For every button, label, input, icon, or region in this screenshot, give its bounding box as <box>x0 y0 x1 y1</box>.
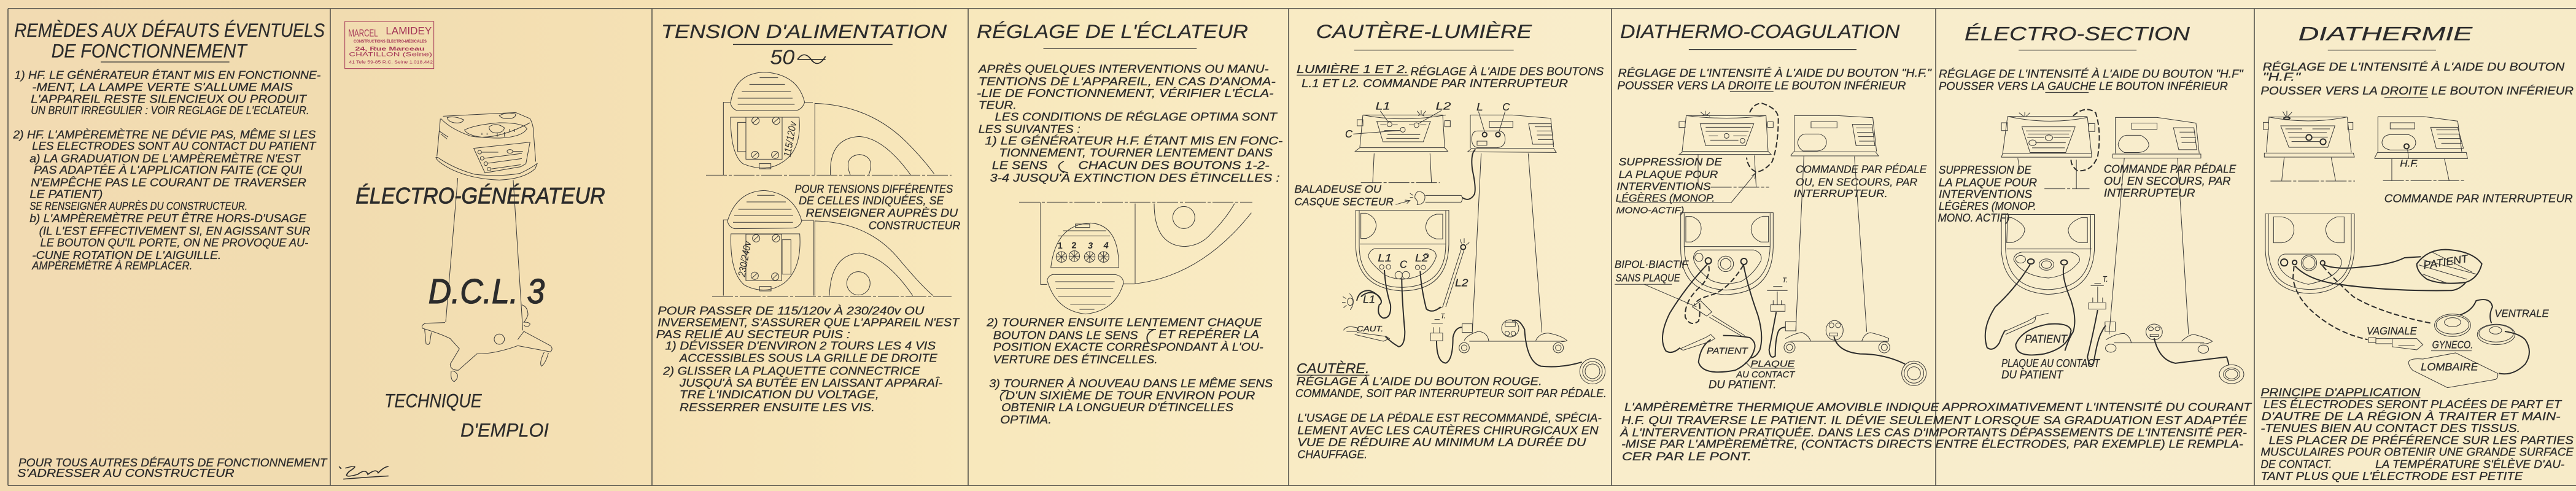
text block: changement de tension: 1) DÉVISSER D'ENVIRON 2 TOURS LES 4 VIS <box>665 339 936 352</box>
diagram: branchement diathermo-coagulation: T. <box>1782 277 1788 284</box>
heading: électro-section: ÉLECTRO-SECTION <box>1965 23 2190 44</box>
text block: conditions de réglage: 3) TOURNER À NOUVEAU DANS LE MÊME SENS <box>989 377 1273 390</box>
diagram: branchement diathermo-coagulation <box>1615 103 1927 385</box>
text block: liste des défauts <box>13 68 320 272</box>
panel: réglage de l'éclateur <box>977 21 1282 426</box>
heading: remèdes: DE FONCTIONNEMENT <box>52 40 248 61</box>
text block: cautère: LEMENT AVEC LES CAUTÈRES CHIRURGICAUX EN <box>1297 424 1599 437</box>
heading: diathermo-coagulation: DIATHERMO-COAGULATION <box>1620 21 1900 42</box>
diagram: branchement cautère-lumière: L1 <box>1378 252 1392 264</box>
text block: liste des défauts: LE BOUTON QU'IL PORTE, ON NE PROVOQUE AU- <box>41 236 308 249</box>
diagram: branchement diathermo-coagulation: LÉGÈRES (MONOP. <box>1616 191 1715 204</box>
diagram: branchement diathermo-coagulation: INTERVENTIONS <box>1616 180 1711 192</box>
callout: tensions différentes: CONSTRUCTEUR <box>869 219 960 232</box>
diagram: branchement électro-section: COMMANDE PAR PÉDALE <box>2104 162 2237 176</box>
text block: liste des défauts: SE RENSEIGNER AUPRÈS DU CONSTRUCTEUR. <box>29 199 247 212</box>
heading: réglage: RÉGLAGE DE L'ÉCLATEUR <box>977 21 1248 42</box>
diagram: boutons de l'éclateur: 2 <box>1071 241 1076 250</box>
text block: lumière: L.1 ET L2. COMMANDE PAR INTERRUPTEUR <box>1302 77 1568 90</box>
icon: stamp: CHATILLON (Seine) <box>349 52 432 58</box>
diagram: branchement diathermie: GYNECO. <box>2432 338 2473 350</box>
text block: liste des défauts: 1) HF. LE GÉNÉRATEUR ÉTANT MIS EN FONCTIONNE- <box>14 68 320 82</box>
text block: conditions de réglage: OPTIMA. <box>1000 414 1052 426</box>
icon: stamp: MARCEL <box>348 27 378 39</box>
panel: électro-section <box>1938 23 2244 384</box>
heading: technique d'emploi: TECHNIQUE <box>384 390 482 411</box>
text block: cautère <box>1295 360 1607 461</box>
callout: tensions différentes <box>794 182 960 232</box>
text block: conditions de réglage: VERTURE DES ÉTINCELLES. <box>993 353 1158 366</box>
text block: liste des défauts: LES ELECTRODES SONT AU CONTACT DU PATIENT <box>32 140 317 152</box>
heading: remèdes: REMÈDES AUX DÉFAUTS ÉVENTUELS <box>14 20 325 41</box>
heading: modèle D.C.L. 3: D.C.L. 3 <box>429 272 545 311</box>
text block: changement de tension: JUSQU'À SA BUTÉE EN LAISSANT APPARAÎ- <box>679 376 942 389</box>
diagram: branchement diathermo-coagulation: LA PLAQUE POUR <box>1619 168 1718 180</box>
diagram: branchement cautère-lumière: L2 <box>1436 99 1451 112</box>
diagram: branchement diathermo-coagulation: SUPPRESSION DE <box>1619 155 1722 168</box>
text block: conditions de réglage: LES SUIVANTES : <box>979 123 1080 136</box>
diagram: branchement diathermie: VAGINALE <box>2367 325 2417 337</box>
icon: stamp: 41 Tele 59-85 R.C. Seine 1.018.442 <box>349 59 433 64</box>
callout: tensions différentes: DE CELLES INDIQUÉES, SE <box>799 194 944 207</box>
text block: réglage électro-section: RÉGLAGE DE L'INTENSITÉ À L'AIDE DU BOUTON "H.F" <box>1939 67 2244 80</box>
diagram: branchement cautère-lumière: BALADEUSE OU <box>1294 183 1381 195</box>
diagram: branchement diathermo-coagulation: BIPOL·BIACTIF <box>1615 258 1689 271</box>
panel: diathermie <box>2260 23 2574 482</box>
diagram: branchement diathermo-coagulation: OU, EN SECOURS, PAR <box>1796 176 1917 188</box>
text block: principe d'application: DE CONTACT. <box>2260 458 2332 471</box>
diagram: branchement diathermie <box>2264 111 2549 388</box>
text block: changement de tension: RESSERRER ENSUITE LES VIS. <box>680 401 875 414</box>
diagram: branchement électro-section: SUPPRESSION DE <box>1939 164 2031 176</box>
text block: liste des défauts: -CUNE ROTATION DE L'AIGUILLE. <box>32 249 221 261</box>
diagram: boutons de l'éclateur: 4 <box>1103 241 1109 250</box>
frequency label 50 <box>770 46 826 69</box>
panel: cautère-lumière <box>1294 21 1607 461</box>
text block: cautère: L'USAGE DE LA PÉDALE EST RECOMMANDÉ, SPÉCIA- <box>1297 411 1602 425</box>
text block: changement de tension: PAS RELIÉ AU SECTEUR PUIS : <box>656 328 850 341</box>
frequency label 50: 50 <box>770 46 795 69</box>
diagram: boutons de l'éclateur: 1 <box>1058 241 1063 251</box>
text block: principe d'application: TANT PLUS QUE L'ÉLECTRODE EST PETITE <box>2260 470 2523 482</box>
footer note: S'ADRESSER AU CONSTRUCTEUR <box>17 467 235 479</box>
text block: conditions de réglage: D'UN SIXIÈME DE TOUR ENVIRON POUR <box>1006 389 1255 402</box>
text block: ampèremètre thermique: CER PAR LE PONT. <box>1622 450 1752 463</box>
diagram: branchement électro-section <box>1938 109 2244 384</box>
label: du patient: DU PATIENT. <box>1709 378 1776 391</box>
diagram: branchement diathermo-coagulation: INTERRUPTEUR. <box>1794 187 1888 199</box>
heading: remèdes <box>14 20 325 62</box>
diagram: boutons de l'éclateur: 3 <box>1088 241 1093 251</box>
text block: conditions de réglage: 1) LE GÉNÉRATEUR H.F. ÉTANT MIS EN FONC- <box>985 134 1282 147</box>
text block: conditions de réglage: TEUR. <box>979 99 1017 112</box>
diagram: branchement électro-section: DU PATIENT <box>2001 368 2064 381</box>
text block: réglage diathermie <box>2260 60 2574 205</box>
diagram: branchement cautère-lumière: L2 <box>1455 277 1468 289</box>
panel: couverture <box>339 21 605 479</box>
heading: technique d'emploi <box>384 390 549 441</box>
diagram: boutons de l'éclateur <box>1019 202 1252 314</box>
text block: conditions de réglage: -LIE DE FONCTIONNEMENT, VÉRIFIER L'ÉCLA- <box>977 87 1273 99</box>
text block: conditions de réglage: POSITION EXACTE CORRESPONDANT À L'OU- <box>993 340 1263 354</box>
text block: conditions de réglage: CHACUN DES BOUTONS 1-2- <box>1078 159 1270 172</box>
diagram: branchement diathermie: LOMBAIRE <box>2421 360 2478 373</box>
heading: tension: TENSION D'ALIMENTATION <box>661 21 947 42</box>
diagram: branchement diathermo-coagulation: MONO-ACTIF) <box>1616 206 1684 215</box>
diagram: branchement cautère-lumière: T. <box>1441 312 1446 320</box>
heading: diathermie: DIATHERMIE <box>2299 23 2473 44</box>
text block: conditions de réglage: TIONNEMENT, TOURNER LENTEMENT DANS <box>999 147 1273 159</box>
text block: lumière <box>1297 63 1604 90</box>
text block: changement de tension: INVERSEMENT, S'ASSURER QUE L'APPAREIL N'EST <box>658 316 960 329</box>
diagram: branchement cautère-lumière: CAUT. <box>1357 324 1383 333</box>
diagram: branchement électro-section: PLAQUE AU CONTACT <box>2001 357 2101 369</box>
text block: cautère: VUE DE RÉDUIRE AU MINIMUM LA DURÉE DU <box>1297 436 1586 449</box>
diagram: branchement cautère-lumière: C <box>1502 101 1510 113</box>
diagram: branchement cautère-lumière: L <box>1476 101 1483 113</box>
text block: lumière: RÉGLAGE À L'AIDE DES BOUTONS <box>1411 64 1604 78</box>
diagram: branchement diathermo-coagulation: AU CONTACT <box>1736 370 1795 380</box>
icon: stamp: LAMIDEY <box>386 25 432 37</box>
text block: changement de tension <box>656 304 960 414</box>
text block: liste des défauts: (IL L'EST EFFECTIVEMENT SI, EN AGISSANT SUR <box>39 225 311 238</box>
text block: lumière: LUMIÈRE 1 ET 2. <box>1297 63 1408 75</box>
diagram: branchement cautère-lumière: CASQUE SECTEUR <box>1294 195 1394 207</box>
text block: conditions de réglage: ET REPÉRER LA <box>1158 328 1259 341</box>
diagram: branchement électro-section: INTERRUPTEUR <box>2104 187 2195 199</box>
diagram: branchement diathermie: VENTRALE <box>2494 307 2549 320</box>
text block: réglage diathermo <box>1617 66 1932 92</box>
text block: liste des défauts: AMPÈREMÈTRE À REMPLACER. <box>31 259 192 272</box>
text block: conditions de réglage: BOUTON DANS LE SENS <box>993 329 1138 342</box>
text block: liste des défauts: -MENT, LA LAMPE VERTE S'ALLUME MAIS <box>32 81 293 93</box>
diagram: branchement électro-section: LA PLAQUE POUR <box>1939 176 2037 189</box>
diagram: connecteur tension <box>706 72 952 296</box>
text block: réglage diathermie: "H.F." <box>2263 71 2302 83</box>
heading: cautère-lumière: CAUTÈRE-LUMIÈRE <box>1316 21 1532 42</box>
text block: changement de tension: 2) GLISSER LA PLAQUETTE CONNECTRICE <box>662 365 920 377</box>
text block: conditions de réglage: 2) TOURNER ENSUITE LENTEMENT CHAQUE <box>986 316 1262 329</box>
text block: cautère: RÉGLAGE À L'AIDE DU BOUTON ROUGE. <box>1297 374 1542 388</box>
diagram: connecteur tension: 115/120v <box>782 120 799 158</box>
diagram: branchement cautère-lumière <box>1294 99 1605 384</box>
diagram: branchement électro-section: PATIENT <box>2025 333 2068 346</box>
icon: stamp: 24, Rue Marceau <box>355 46 425 52</box>
panel: remèdes aux défauts <box>13 20 328 479</box>
diagram: branchement diathermie: PATIENT <box>2423 252 2470 271</box>
text block: conditions de réglage: TENTIONS DE L'APPAREIL, EN CAS D'ANOMA- <box>979 75 1276 88</box>
icon: generator on stand <box>422 112 552 382</box>
text block: réglage électro-section <box>1939 67 2244 93</box>
diagram: branchement diathermie: H.F. <box>2400 159 2418 169</box>
text block: conditions de réglage <box>977 62 1282 426</box>
footer note <box>17 456 328 479</box>
text block: réglage diathermo: RÉGLAGE DE L'INTENSITÉ À L'AIDE DU BOUTON "H.F." <box>1618 66 1932 79</box>
text block: liste des défauts: N'EMPÊCHE PAS LE COURANT DE TRAVERSER <box>31 176 306 189</box>
heading: technique d'emploi: D'EMPLOI <box>460 419 549 441</box>
panel: tension d'alimentation <box>656 21 960 414</box>
text block: principe d'application <box>2260 386 2574 482</box>
diagram: branchement électro-section: T. <box>2103 275 2108 284</box>
text block: changement de tension: ACCESSIBLES SOUS LA GRILLE DE DROITE <box>678 352 937 365</box>
text block: liste des défauts: L'APPAREIL RESTE SILENCIEUX OU PRODUIT <box>31 93 308 106</box>
diagram: branchement électro-section: OU, EN SECOURS, PAR <box>2104 175 2231 187</box>
text block: réglage électro-section: POUSSER VERS LA GAUCHE LE BOUTON INFÉRIEUR <box>1939 79 2228 93</box>
text block: principe d'application: -TENUES BIEN AU CONTACT DES TISSUS. <box>2260 422 2520 435</box>
text block: changement de tension: TRE L'INDICATION DU VOLTAGE, <box>680 389 879 401</box>
text block: liste des défauts: 2) HF. L'AMPÈREMÈTRE NE DÉVIE PAS, MÊME SI LES <box>13 128 316 141</box>
icon: stamp <box>345 21 434 69</box>
text block: réglage diathermo: POUSSER VERS LA DROITE LE BOUTON INFÉRIEUR <box>1617 79 1906 92</box>
diagram: branchement cautère-lumière: C <box>1345 128 1352 140</box>
text block: liste des défauts: a) LA GRADUATION DE L'AMPÈREMÈTRE N'EST <box>29 152 301 165</box>
text block: conditions de réglage: OBTENIR LA LONGUEUR D'ÉTINCELLES <box>1001 401 1234 414</box>
icon: signature <box>339 466 389 479</box>
diagram: connecteur tension: 230/240v <box>735 239 754 278</box>
text block: principe d'application: PRINCIPE D'APPLICATION <box>2260 386 2421 399</box>
diagram: branchement diathermo-coagulation: SANS PLAQUE <box>1616 271 1680 284</box>
text block: liste des défauts: b) L'AMPÈREMÈTRE PEUT ÊTRE HORS-D'USAGE <box>29 212 306 225</box>
text block: conditions de réglage: LE SENS <box>992 159 1048 172</box>
diagram: branchement électro-section: LÉGÈRES (MONOP. <box>1939 199 2036 212</box>
text block: conditions de réglage: 3-4 JUSQU'À EXTINCTION DES ÉTINCELLES : <box>990 171 1280 184</box>
text block: cautère: CHAUFFAGE. <box>1297 448 1367 461</box>
diagram: branchement cautère-lumière: L2 <box>1415 252 1429 264</box>
text block: cautère: COMMANDE, SOIT PAR INTERRUPTEUR SOIT PAR PÉDALE. <box>1295 387 1607 400</box>
panel: diathermo-coagulation <box>1615 21 1932 391</box>
diagram: branchement cautère-lumière: C <box>1400 258 1407 271</box>
text block: conditions de réglage: LES CONDITIONS DE RÉGLAGE OPTIMA SONT <box>995 110 1278 123</box>
icon: stamp: CONSTRUCTIONS ÉLECTRO-MÉDICALES <box>354 38 427 44</box>
text block: ampèremètre thermique <box>1620 401 2252 463</box>
diagram: branchement diathermo-coagulation: COMMANDE PAR PÉDALE <box>1796 163 1927 176</box>
diagram: branchement cautère-lumière: L1 <box>1363 293 1375 305</box>
text block: liste des défauts: PAS ADAPTÉE À L'APPLICATION FAITE (CE QUI <box>34 163 302 176</box>
diagram: branchement diathermo-coagulation: PLAQUE <box>1751 359 1795 369</box>
callout: tensions différentes: POUR TENSIONS DIFFÉRENTES <box>794 182 953 195</box>
diagram: branchement cautère-lumière: L1 <box>1376 99 1391 112</box>
text block: cautère: CAUTÈRE. <box>1297 360 1370 376</box>
text block: liste des défauts: UN BRUIT IRREGULIER : VOIR REGLAGE DE L'ECLATEUR. <box>31 104 309 117</box>
diagram: branchement diathermo-coagulation: PATIENT <box>1707 347 1748 357</box>
diagram: branchement électro-section: MONO. ACTIF) <box>1938 212 2009 225</box>
footer note: POUR TOUS AUTRES DÉFAUTS DE FONCTIONNEMENT <box>18 456 328 469</box>
diagram: branchement électro-section: INTERVENTIONS <box>1939 188 2033 201</box>
text block: principe d'application: D'AUTRE DE LA RÉGION À TRAITER ET MAIN- <box>2262 410 2561 423</box>
text block: conditions de réglage: APRÈS QUELQUES INTERVENTIONS OU MANU- <box>977 62 1268 75</box>
text block: liste des défauts: LE PATIENT) <box>29 188 103 201</box>
heading: électro-générateur: ÉLECTRO-GÉNÉRATEUR <box>355 184 605 209</box>
callout: tensions différentes: RENSEIGNER AUPRÈS DU <box>805 206 958 219</box>
text block: changement de tension: POUR PASSER DE 115/120v À 230/240v OU <box>658 304 925 317</box>
